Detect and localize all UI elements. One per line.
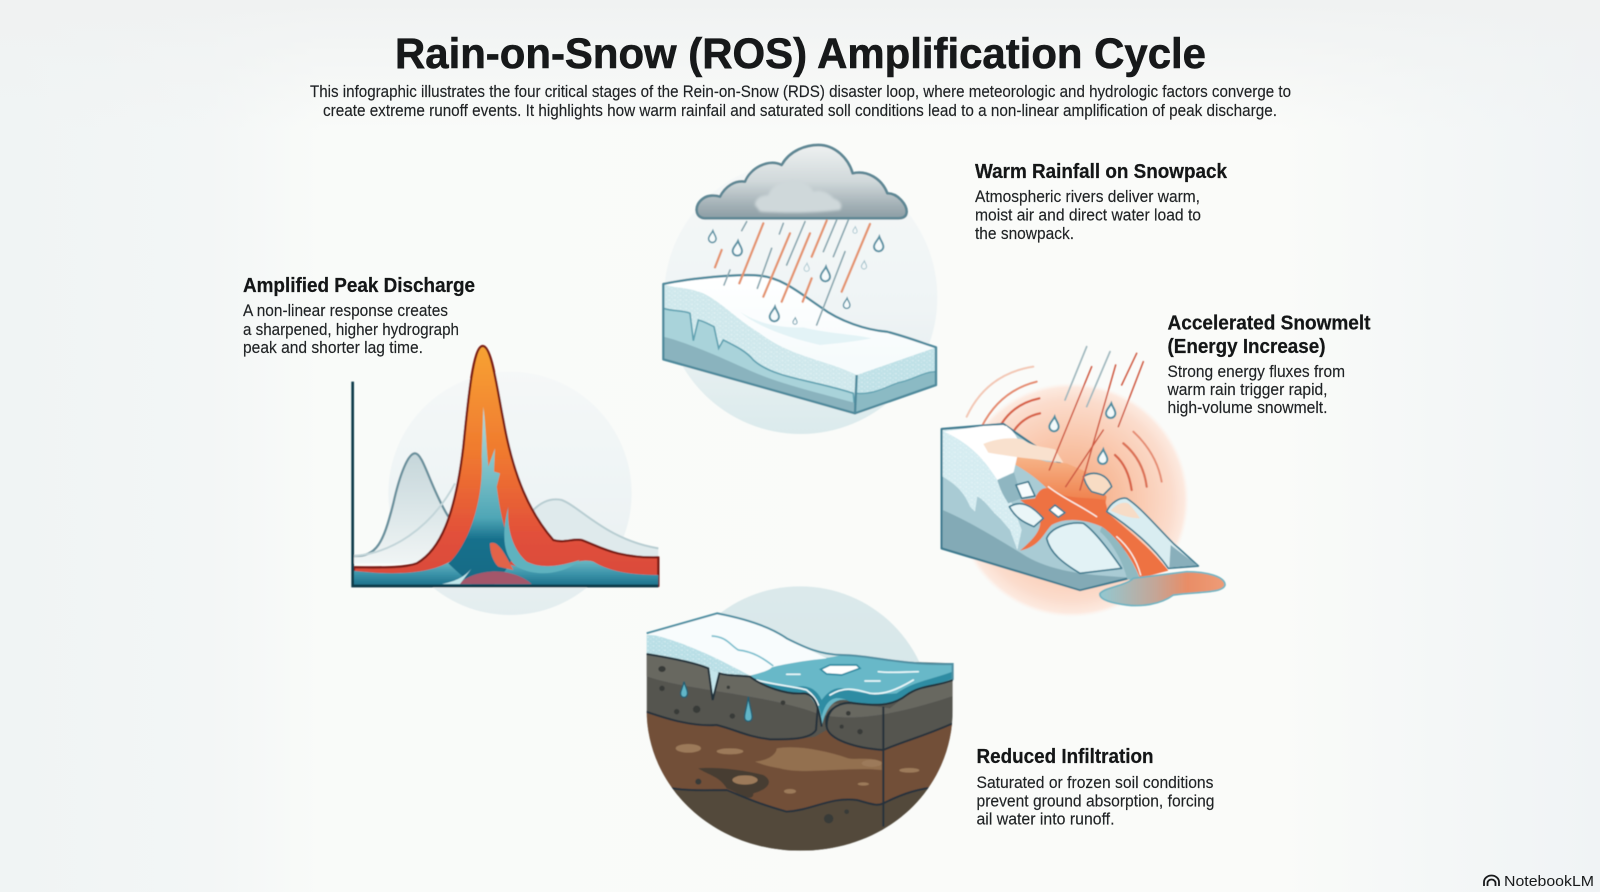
body bbox=[976, 774, 1214, 828]
illustration: amplified hydrograph bbox=[353, 346, 658, 615]
heat rings bbox=[967, 367, 1162, 490]
right teal sweep bbox=[504, 507, 580, 573]
text: reduced infiltration bbox=[976, 745, 1214, 828]
wordmark: NotebookLM bbox=[1504, 873, 1594, 890]
heading: Amplified Peak Discharge bbox=[243, 274, 475, 297]
heading: Reduced Infiltration bbox=[976, 745, 1154, 768]
amplified peak bbox=[353, 346, 658, 586]
pale snow face bbox=[943, 426, 1022, 550]
water seepage drops bbox=[681, 682, 752, 721]
body: Saturated or frozen soil conditions bbox=[976, 774, 1214, 792]
snow block right face bbox=[855, 347, 936, 413]
ice crack bbox=[708, 668, 719, 700]
base water glow bbox=[458, 572, 532, 584]
brown stones bbox=[676, 744, 919, 794]
body bbox=[1167, 363, 1345, 417]
heading: (Energy Increase) bbox=[1168, 335, 1326, 358]
red tongue bbox=[490, 543, 513, 570]
ice chunks bbox=[1009, 473, 1198, 573]
backdrop circle bbox=[668, 586, 932, 850]
falling rain bbox=[1049, 347, 1143, 490]
body bbox=[975, 188, 1201, 243]
cloud bbox=[697, 145, 907, 218]
text: amplified peak discharge bbox=[243, 274, 475, 357]
illustration: warm rain on snowpack bbox=[663, 145, 937, 434]
heading: Accelerated Snowmelt bbox=[1168, 312, 1371, 334]
body: Atmospheric rivers deliver warm, bbox=[975, 188, 1200, 206]
axes bbox=[353, 382, 658, 586]
vertical fracture line bbox=[882, 706, 885, 827]
right tail shadow bbox=[1169, 545, 1197, 567]
meltwater stream bbox=[1100, 527, 1141, 581]
surface outline bbox=[647, 613, 953, 680]
text: accelerated snowmelt bbox=[1167, 312, 1371, 417]
soil top outline with cracks bbox=[647, 654, 953, 727]
text: warm rainfall on snowpack bbox=[975, 160, 1228, 243]
subtitle: create extreme runoff events. It highlights how warm rainfail and saturated soll conditions lead to a non-linear amplification of peak discharge. bbox=[323, 102, 1277, 120]
body: Strong energy fluxes from bbox=[1168, 363, 1345, 381]
snow block front face bbox=[663, 276, 857, 413]
illustration: reduced infiltration bbox=[643, 586, 957, 857]
body: high-volume snowmelt. bbox=[1168, 399, 1328, 417]
water streaks bbox=[757, 672, 918, 705]
subtitle bbox=[310, 83, 1291, 120]
heading: Warm Rainfall on Snowpack bbox=[975, 160, 1228, 183]
body: A non-linear response creates bbox=[243, 302, 448, 320]
baseline ghost hydrograph bbox=[354, 453, 453, 563]
inner cloud bbox=[755, 180, 841, 213]
backdrop circle bbox=[388, 372, 632, 615]
body: ail water into runoff. bbox=[976, 810, 1114, 828]
runoff pool bbox=[1100, 572, 1225, 606]
baseline teal band bbox=[353, 561, 658, 586]
snow on top bbox=[647, 613, 827, 676]
soil layer outlines bbox=[646, 708, 953, 752]
teal plume bbox=[448, 407, 513, 586]
rain streaks bbox=[715, 220, 870, 325]
snow depression bbox=[740, 312, 872, 345]
body: prevent ground absorption, forcing bbox=[976, 792, 1214, 810]
snow block outline bbox=[663, 275, 936, 413]
soil cross-section bbox=[643, 653, 957, 857]
subtitle: This infographic illustrates the four critical stages of the Rein-on-Snow (RDS) disaster loop, where meteorologic and hydrologic factors converge to bbox=[310, 83, 1291, 101]
snow cleft bbox=[997, 473, 1022, 503]
illustration: accelerated snowmelt bbox=[942, 347, 1225, 617]
melt pool island bbox=[821, 665, 860, 675]
snow block top surface bbox=[663, 275, 936, 375]
backdrop circle bbox=[664, 161, 937, 434]
heading bbox=[1168, 312, 1371, 358]
NotebookLM badge bbox=[1484, 873, 1594, 890]
snow side band bbox=[647, 635, 750, 676]
slab body bbox=[942, 424, 1128, 590]
white snow cap bbox=[944, 425, 1020, 480]
delayed ghost hydrograph bbox=[354, 483, 455, 556]
title: Rain-on-Snow (ROS) Amplification Cycle bbox=[395, 30, 1206, 78]
body: the snowpack. bbox=[975, 225, 1074, 243]
soil pebbles bbox=[658, 666, 863, 823]
body: a sharpened, higher hydrograph bbox=[243, 321, 459, 339]
peach speckled snow bbox=[983, 438, 1063, 463]
heat glow bbox=[954, 383, 1189, 617]
rain drops bbox=[709, 227, 883, 324]
icon: notebook logo bbox=[1484, 876, 1499, 886]
upper melt gradient bbox=[988, 453, 1107, 507]
peach tint on right chunk bbox=[1111, 503, 1140, 518]
melt drops bbox=[1049, 403, 1115, 464]
water surface bbox=[750, 655, 953, 727]
body bbox=[243, 302, 459, 357]
stream on snow bbox=[712, 636, 773, 666]
body: moist air and direct water load to bbox=[975, 206, 1201, 224]
orange meltwater channels bbox=[1020, 488, 1168, 578]
body: peak and shorter lag time. bbox=[243, 339, 423, 357]
body: warm rain trigger rapid, bbox=[1167, 381, 1328, 399]
